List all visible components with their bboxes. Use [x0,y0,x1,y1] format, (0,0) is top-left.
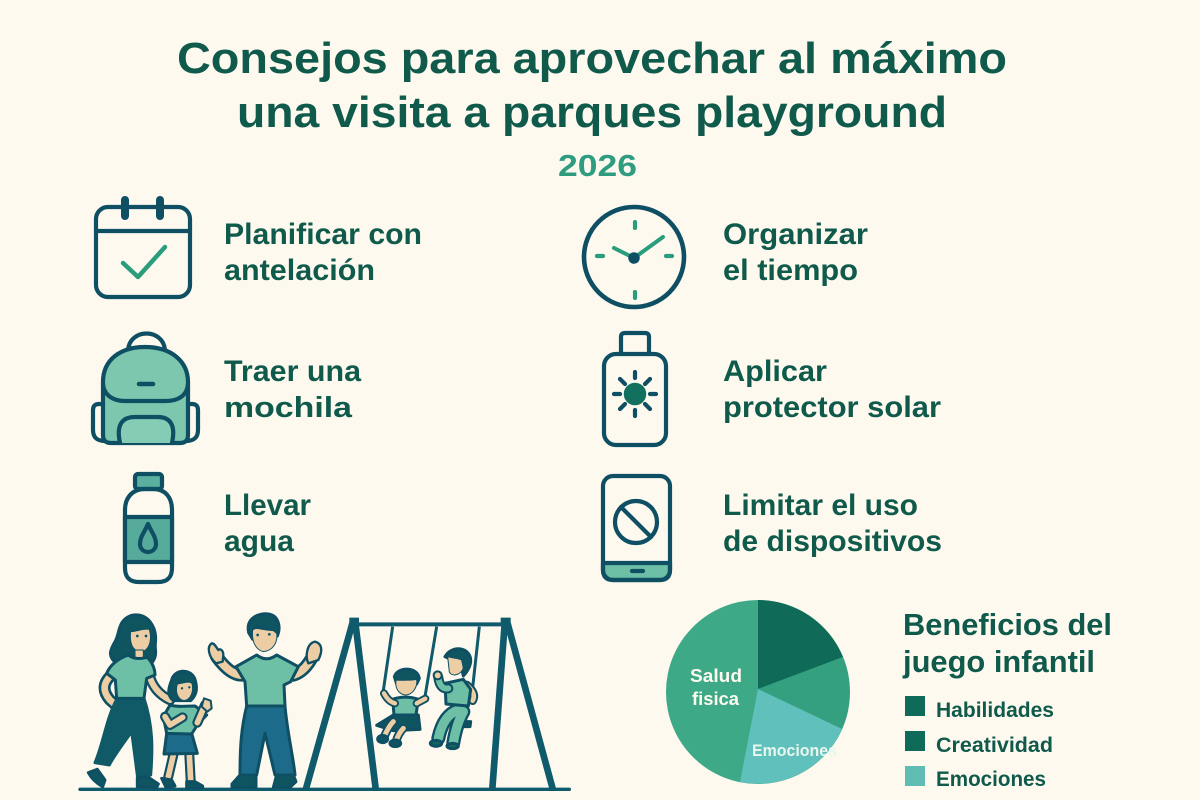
swing set frame [306,620,553,789]
legend: Habilidades [936,699,1054,722]
tip: mochila: Traer una [224,355,361,388]
icon: calendar [96,200,190,297]
child on swing, left [377,669,425,747]
tip: organizar: el tiempo [723,254,858,287]
illustration: family at the playground swing [80,614,569,789]
legend: Creatividad [936,734,1053,757]
subtitle: year: 2026 [558,148,637,183]
tip: protector solar [723,355,941,424]
ground line [80,784,569,794]
tip: mochila: mochila [224,392,353,424]
legend heading: Beneficios del [903,607,1112,642]
tip: dispositivos: Limitar el uso [723,489,918,522]
tip: agua [224,489,311,558]
legend: Emociones [936,768,1046,791]
tip: mochila [224,355,361,424]
icon: backpack [93,334,198,443]
girl [162,671,212,788]
tip: organizar [723,218,868,287]
tip: agua: agua [224,525,294,558]
icon: phone with prohibition sign [603,476,670,580]
woman [88,615,170,787]
icon: clock [584,207,684,307]
title: una visita a parques playground [237,88,947,137]
tip: dispositivos [723,489,942,558]
legend [905,696,1054,791]
legend heading [902,607,1112,679]
tip: agua: Llevar [224,489,311,522]
pie label: salud fisica [690,666,742,709]
legend heading: juego infantil [902,644,1095,679]
tip: dispositivos: de dispositivos [723,525,942,558]
man [209,614,321,787]
tip: organizar: Organizar [723,218,868,251]
icon: sunscreen [604,333,666,445]
title: Consejos para aprovechar al máximo [177,34,1007,83]
pie chart: benefits [666,600,850,784]
slice: salud fisica [666,600,850,784]
tip: planificar: antelación [224,254,375,287]
tip: planificar [224,218,422,287]
tip: planificar: Planificar con [224,218,422,251]
tip: protector solar: Aplicar [723,355,827,388]
pie label: salud fisica: Salud [690,666,742,686]
icon: water bottle [125,474,172,582]
pie label: emociones: Emociones [752,741,837,760]
pie label: salud fisica: fisica [692,689,740,709]
title [177,34,1007,137]
child on swing, right [430,649,474,749]
tip: protector solar: protector solar [723,391,941,424]
